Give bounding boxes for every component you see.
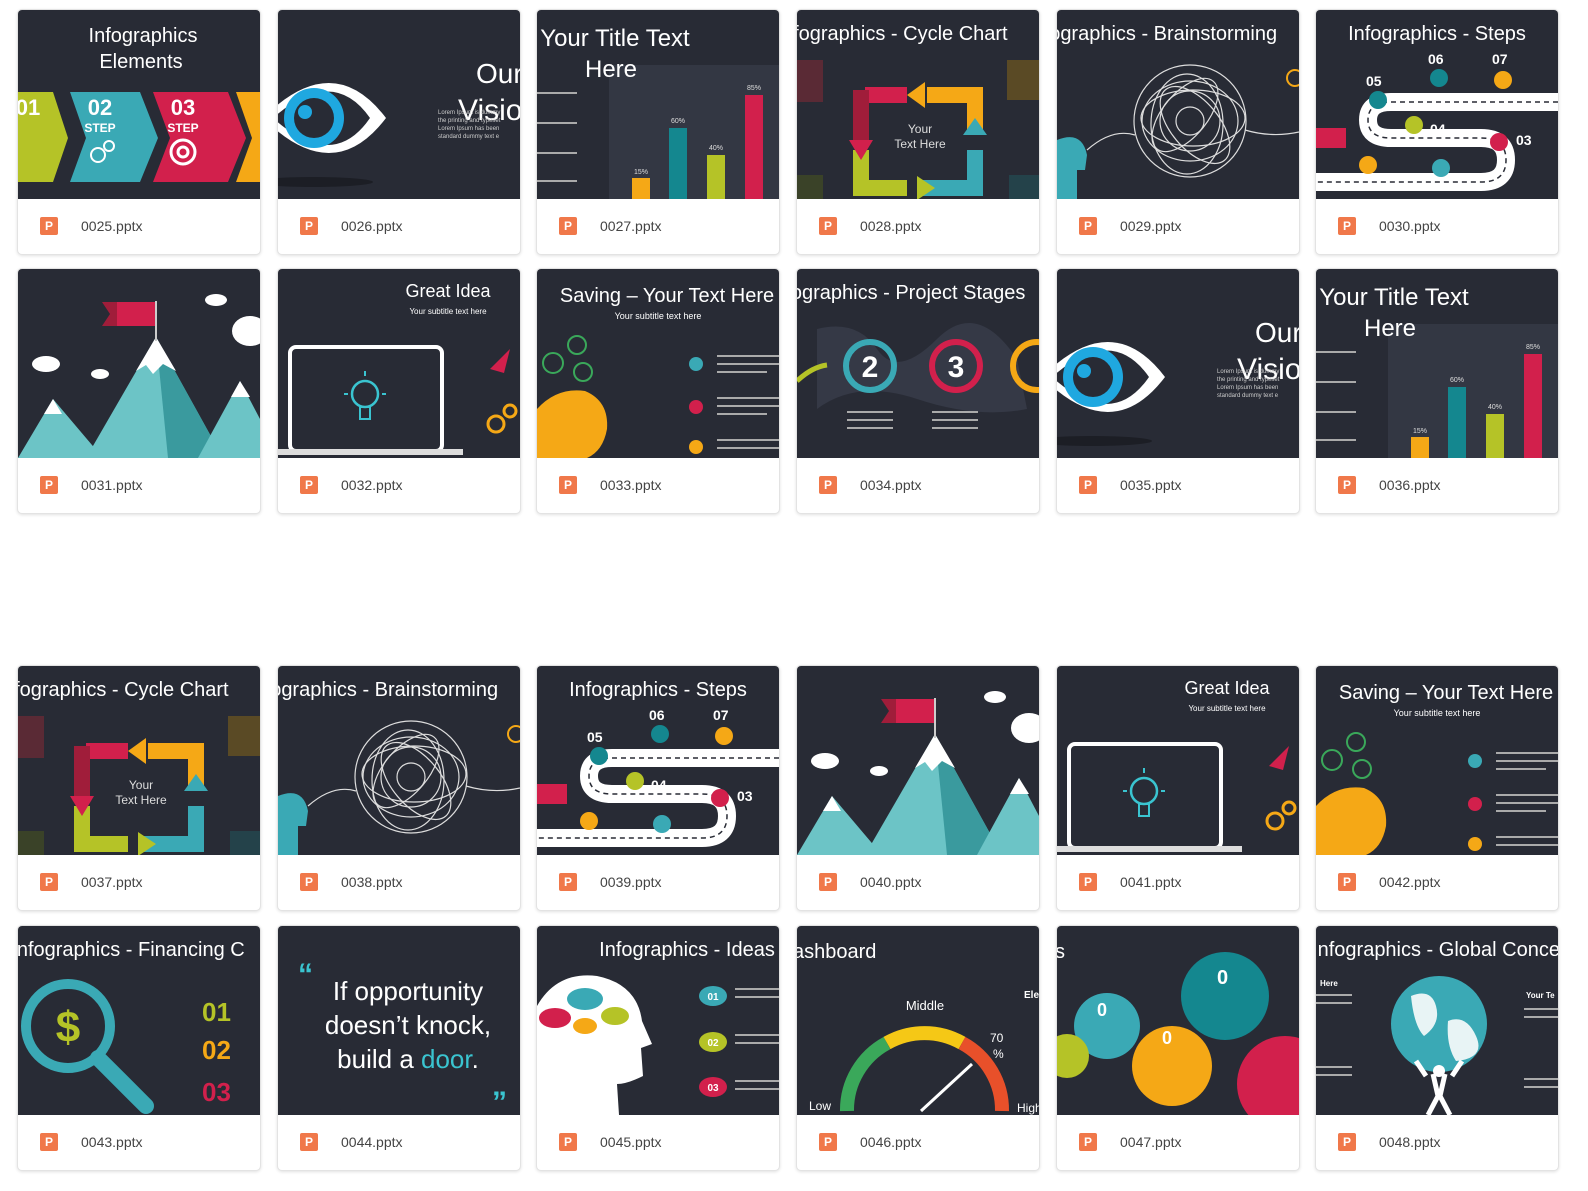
thumbnail: global globe: Your Te [1526, 991, 1555, 1000]
card 0032: P [305, 478, 313, 492]
card 0045 [536, 925, 780, 1171]
thumbnail: cycle chart: Text Here [115, 793, 167, 807]
thumbnail: bar chart: 40% [1488, 404, 1502, 411]
card 0030: P [1343, 219, 1351, 233]
thumbnail: steps chevrons: Elements [99, 51, 183, 73]
card 0031 [17, 268, 261, 514]
card 0037: 0037.pptx [81, 874, 142, 890]
thumbnail: quote: doesn’t knock, [325, 1010, 491, 1040]
thumbnail: bar chart: 60% [1450, 377, 1464, 384]
thumbnail: bar chart: 40% [709, 145, 723, 152]
card 0037: P [45, 875, 53, 889]
thumbnail: quote: “ [298, 958, 313, 991]
thumbnail: quote: build a door. [337, 1044, 479, 1074]
card 0044: P [305, 1135, 313, 1149]
thumbnail: circles steps: 0 [1217, 967, 1228, 989]
thumbnail: dashboard gauge: Middle [906, 998, 944, 1013]
thumbnail: quote: If opportunity [333, 976, 483, 1006]
card 0046 [796, 925, 1040, 1171]
card 0042 [1315, 665, 1559, 911]
thumbnail: vision eye: Lorem Ipsum is dummy [1217, 369, 1279, 375]
card 0030: 0030.pptx [1379, 218, 1440, 234]
thumbnail: steps road: 05 [587, 729, 603, 745]
card 0045: 0045.pptx [600, 1134, 662, 1150]
thumbnail: steps chevrons: Infographics [89, 25, 197, 47]
thumbnail: dashboard gauge: Ele [1024, 990, 1039, 1001]
thumbnail: great idea laptop: Great Idea [405, 281, 492, 301]
card 0025: P [45, 219, 53, 233]
card 0029 [1056, 9, 1300, 255]
card 0028: 0028.pptx [860, 218, 922, 234]
thumbnail: bar chart: 85% [747, 85, 761, 92]
thumbnail: global globe [1316, 926, 1558, 1115]
thumbnail: vision eye: the printing and typeset [1217, 377, 1280, 383]
card 0044 [277, 925, 521, 1171]
thumbnail: quote [278, 926, 520, 1115]
thumbnail: vision eye: standard dummy text e [1217, 393, 1279, 399]
thumbnail: mountains [18, 269, 260, 458]
thumbnail: financing magnifier: $ [56, 1003, 80, 1052]
thumbnail: vision eye: the printing and typeset [438, 118, 501, 124]
thumbnail: steps road: 04 [651, 777, 667, 793]
card 0038 [277, 665, 521, 911]
thumbnail: dashboard gauge: % [993, 1047, 1004, 1061]
thumbnail: cycle chart: Your [129, 778, 153, 792]
card 0034: 0034.pptx [860, 477, 922, 493]
card 0043 [17, 925, 261, 1171]
card 0047 [1056, 925, 1300, 1171]
thumbnail: project stages: 2 [862, 351, 878, 384]
card 0025 [17, 9, 261, 255]
card 0039 [536, 665, 780, 911]
card 0048: P [1343, 1135, 1351, 1149]
thumbnail: global globe: Infographics - Global Conce [1316, 939, 1558, 961]
card 0028: P [824, 219, 832, 233]
thumbnail: circles steps: 0 [1097, 1000, 1107, 1020]
card 0025: 0025.pptx [81, 218, 142, 234]
thumbnail: dashboard gauge: 70 [990, 1031, 1004, 1045]
thumbnail: bar chart: Your Title Text [540, 25, 690, 52]
thumbnail: bar chart [537, 10, 779, 199]
thumbnail: vision eye [278, 10, 520, 199]
thumbnail: steps chevrons: STEP [167, 121, 199, 135]
card 0031: P [45, 478, 53, 492]
card 0040: P [824, 875, 832, 889]
thumbnail: steps road: 07 [1492, 51, 1508, 67]
thumbnail: steps road [537, 666, 779, 855]
card 0035: 0035.pptx [1120, 477, 1182, 493]
card 0046: 0046.pptx [860, 1134, 922, 1150]
card 0041: P [1084, 875, 1092, 889]
thumbnail: steps road: 04 [1430, 121, 1446, 137]
thumbnail: dashboard gauge: Low [809, 1099, 831, 1113]
thumbnail: financing magnifier: 01 [202, 997, 231, 1027]
thumbnail: saving piggy [537, 269, 779, 458]
thumbnail: saving piggy: Saving – Your Text Here [1339, 682, 1553, 704]
thumbnail: ideas head: 03 [707, 1083, 719, 1094]
card 0042: 0042.pptx [1379, 874, 1440, 890]
thumbnail: great idea laptop [278, 269, 520, 458]
thumbnail: vision eye: standard dummy text e [438, 134, 500, 140]
card 0030 [1315, 9, 1559, 255]
thumbnail: steps road: Infographics - Steps [569, 679, 747, 701]
thumbnail: cycle chart: Text Here [894, 137, 946, 151]
thumbnail: steps chevrons: STEP [84, 121, 116, 135]
thumbnail: cycle chart: Your [908, 122, 932, 136]
thumbnail: brainstorming [278, 666, 520, 855]
card 0036: 0036.pptx [1379, 477, 1440, 493]
card 0039: P [564, 875, 572, 889]
card 0028 [796, 9, 1040, 255]
card 0033: 0033.pptx [600, 477, 662, 493]
thumbnail: steps road: Infographics - Steps [1348, 23, 1526, 45]
thumbnail: circles steps: 0 [1162, 1028, 1172, 1048]
card 0026: 0026.pptx [341, 218, 402, 234]
thumbnail: bar chart: 85% [1526, 344, 1540, 351]
thumbnail: circles steps [1057, 926, 1299, 1115]
thumbnail: financing magnifier [18, 926, 260, 1115]
card 0041: 0041.pptx [1120, 874, 1182, 890]
thumbnail: steps chevrons [18, 10, 260, 199]
card 0033: P [564, 478, 572, 492]
card 0042: P [1343, 875, 1351, 889]
thumbnail: cycle chart [797, 10, 1039, 199]
thumbnail: great idea laptop: Your subtitle text here [409, 307, 487, 316]
card 0048: 0048.pptx [1379, 1134, 1440, 1150]
card 0039: 0039.pptx [600, 874, 662, 890]
thumbnail: vision eye: Lorem Ipsum has been [1217, 385, 1278, 391]
thumbnail: bar chart: 15% [1413, 428, 1427, 435]
card 0048 [1315, 925, 1559, 1171]
thumbnail: great idea laptop: Great Idea [1184, 678, 1271, 698]
thumbnail: steps road: 03 [1516, 132, 1532, 148]
card 0043: 0043.pptx [81, 1134, 142, 1150]
card 0027: 0027.pptx [600, 218, 662, 234]
thumbnail: cycle chart [18, 666, 260, 855]
thumbnail: steps road: 06 [649, 707, 665, 723]
card 0037 [17, 665, 261, 911]
thumbnail: steps road: 03 [737, 788, 753, 804]
thumbnail: steps road: 05 [1366, 73, 1382, 89]
card 0034: P [824, 478, 832, 492]
card 0034 [796, 268, 1040, 514]
thumbnail: steps road: 06 [1428, 51, 1444, 67]
card 0036: P [1343, 478, 1351, 492]
card 0035: P [1084, 478, 1092, 492]
card 0032: 0032.pptx [341, 477, 402, 493]
thumbnail: saving piggy: Your subtitle text here [1394, 708, 1480, 718]
card 0027 [536, 9, 780, 255]
card 0031: 0031.pptx [81, 477, 142, 493]
thumbnail: vision eye [1057, 269, 1299, 458]
card 0029: P [1084, 219, 1092, 233]
card 0041 [1056, 665, 1300, 911]
thumbnail: steps road: 07 [713, 707, 729, 723]
card 0047: P [1084, 1135, 1092, 1149]
thumbnail: mountains [797, 666, 1039, 855]
thumbnail: bar chart: Your Title Text [1319, 284, 1469, 311]
card 0043: P [45, 1135, 53, 1149]
card 0040: 0040.pptx [860, 874, 922, 890]
thumbnail: steps road [1316, 10, 1558, 199]
thumbnail: great idea laptop [1057, 666, 1299, 855]
thumbnail: ideas head: 01 [707, 992, 719, 1003]
thumbnail: saving piggy [1316, 666, 1558, 855]
card 0026: P [305, 219, 313, 233]
thumbnail: steps chevrons: 03 [171, 95, 195, 120]
card 0035 [1056, 268, 1300, 514]
thumbnail: financing magnifier: 02 [202, 1035, 231, 1065]
card 0033 [536, 268, 780, 514]
thumbnail: ideas head [537, 926, 779, 1115]
card 0026 [277, 9, 521, 255]
card 0044: 0044.pptx [341, 1134, 402, 1150]
thumbnail: project stages [797, 269, 1039, 458]
card 0038: P [305, 875, 313, 889]
thumbnail: brainstorming [1057, 10, 1299, 199]
card 0029: 0029.pptx [1120, 218, 1182, 234]
thumbnail: ideas head: 02 [707, 1038, 719, 1049]
thumbnail: project stages: 3 [948, 351, 964, 384]
thumbnail: vision eye: Lorem Ipsum is dummy [438, 110, 500, 116]
card 0046: P [824, 1135, 832, 1149]
thumbnail: bar chart: Here [1364, 315, 1416, 342]
card 0036 [1315, 268, 1559, 514]
thumbnail: financing magnifier: 03 [202, 1077, 231, 1107]
card 0040 [796, 665, 1040, 911]
card 0032 [277, 268, 521, 514]
thumbnail: bar chart: Here [585, 56, 637, 83]
thumbnail: great idea laptop: Your subtitle text here [1188, 704, 1266, 713]
card 0027: P [564, 219, 572, 233]
thumbnail: global globe: Here [1320, 979, 1338, 988]
thumbnail: bar chart [1316, 269, 1558, 458]
thumbnail: dashboard gauge [797, 926, 1039, 1115]
card 0038: 0038.pptx [341, 874, 402, 890]
thumbnail: steps chevrons: 02 [88, 95, 112, 120]
thumbnail: ideas head: Infographics - Ideas [599, 939, 775, 961]
thumbnail: vision eye: Lorem Ipsum has been [438, 126, 499, 132]
card 0045: P [564, 1135, 572, 1149]
card 0047: 0047.pptx [1120, 1134, 1182, 1150]
thumbnail: bar chart: 15% [634, 169, 648, 176]
thumbnail: saving piggy: Saving – Your Text Here [560, 285, 774, 307]
thumbnail: saving piggy: Your subtitle text here [615, 311, 701, 321]
thumbnail: financing magnifier: Infographics - Financing C [18, 939, 245, 961]
thumbnail: bar chart: 60% [671, 118, 685, 125]
